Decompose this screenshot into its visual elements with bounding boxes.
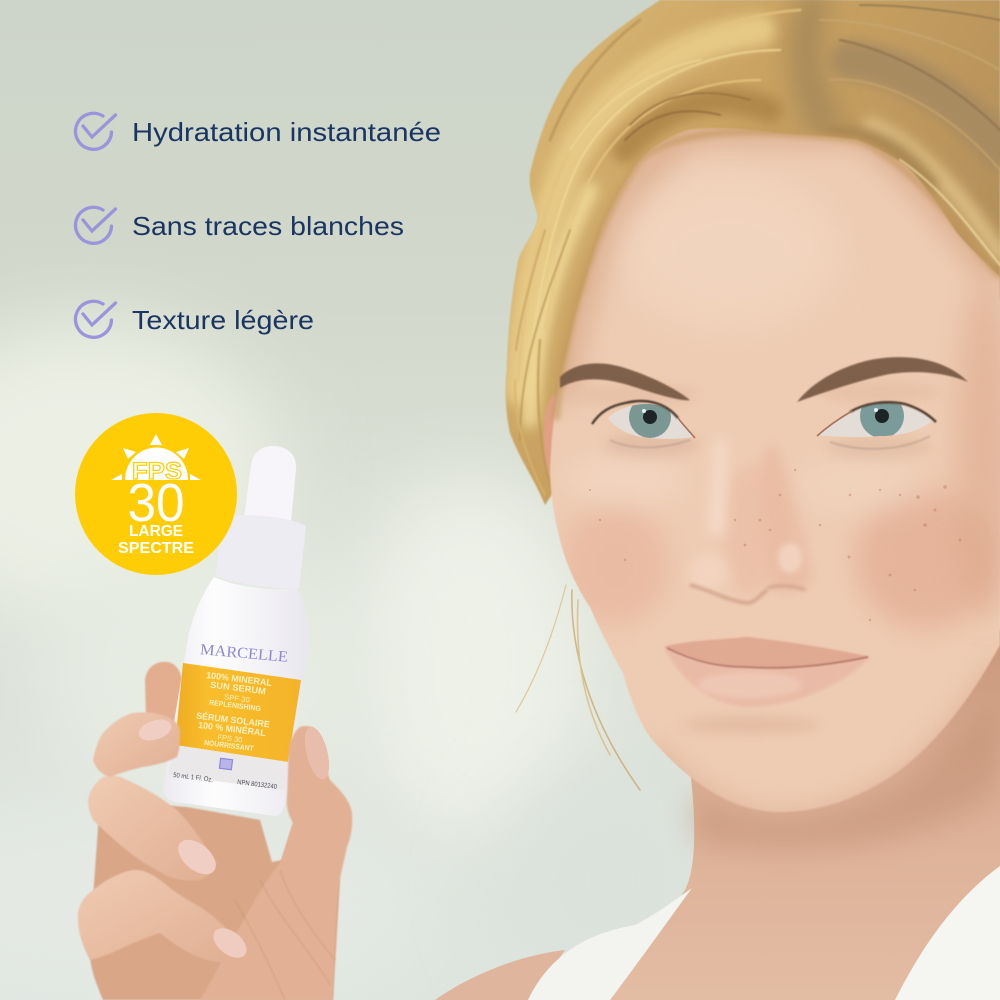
label text: REPLENISHING <box>209 698 261 713</box>
label text: 100% MINERAL <box>206 670 273 688</box>
check icon <box>76 301 116 337</box>
palm creases <box>235 870 335 1000</box>
face shading <box>560 130 1000 830</box>
item: texture <box>76 301 314 337</box>
face <box>550 128 1000 812</box>
thumb <box>200 726 352 1000</box>
hair back <box>506 0 1000 505</box>
shoulder <box>435 950 565 1000</box>
lips <box>664 637 870 707</box>
label text: 100 % MINÉRAL <box>198 720 267 738</box>
SPF badge: SPECTRE <box>118 540 194 557</box>
back fingertip <box>145 662 182 730</box>
index nail <box>136 716 174 744</box>
bottle brand: MARCELLE <box>199 641 289 666</box>
check icon <box>76 113 116 149</box>
eye right <box>817 394 936 449</box>
sun icon <box>111 434 201 480</box>
collar <box>216 515 306 588</box>
label text: NOURRISSANT <box>204 738 255 753</box>
hair soft masses <box>520 0 1000 420</box>
hairline edge <box>556 132 1000 420</box>
item: hydratation: Hydratation instantanée <box>132 117 441 147</box>
ear <box>544 395 562 478</box>
middle finger <box>88 776 217 881</box>
label text <box>196 670 273 753</box>
badge caption: LARGE <box>129 523 183 540</box>
bottle small logo <box>219 758 233 770</box>
lower grey band <box>168 745 288 790</box>
ring nail <box>208 922 252 964</box>
eye left <box>592 396 695 448</box>
label text: SPF 30 <box>223 692 250 705</box>
benefits list <box>76 113 441 337</box>
label text: FPS 30 <box>217 733 243 744</box>
product bottle <box>163 446 308 816</box>
middle nail <box>172 833 222 881</box>
palm <box>90 800 340 1000</box>
bottle fine print <box>173 772 277 791</box>
ring finger <box>78 870 247 962</box>
bottle fine print: 50 mL 1 Fl. Oz. <box>173 772 213 784</box>
label text: SUN SERUM <box>210 680 266 696</box>
item: traces <box>76 207 404 243</box>
hand <box>78 712 352 1000</box>
woman portrait <box>435 0 1000 1000</box>
thumb nail <box>300 724 334 782</box>
hair fine strands <box>515 5 1000 495</box>
item: traces: Sans traces blanches <box>132 211 404 241</box>
neck shadow <box>690 700 1000 849</box>
yellow label band <box>175 663 301 762</box>
eyebrow left <box>560 363 690 400</box>
nose <box>688 440 812 603</box>
FPS label: FPS <box>132 458 182 485</box>
eyebrow right <box>797 357 968 402</box>
item: hydratation <box>76 113 441 149</box>
dropper bulb <box>244 446 296 522</box>
loose strands <box>516 585 640 790</box>
item: texture: Texture légère <box>132 305 314 335</box>
number 30: 30 <box>128 473 184 533</box>
white top right <box>895 866 1000 1000</box>
neck <box>610 630 1000 1000</box>
check icon <box>76 207 116 243</box>
freckles <box>589 469 962 621</box>
bottle fine print: NPN 80132240 <box>237 779 277 791</box>
white top left <box>528 888 692 1000</box>
SPF badge <box>75 413 237 575</box>
index finger <box>93 712 180 777</box>
body <box>163 577 308 816</box>
label text: SÉRUM SOLAIRE <box>196 711 270 729</box>
